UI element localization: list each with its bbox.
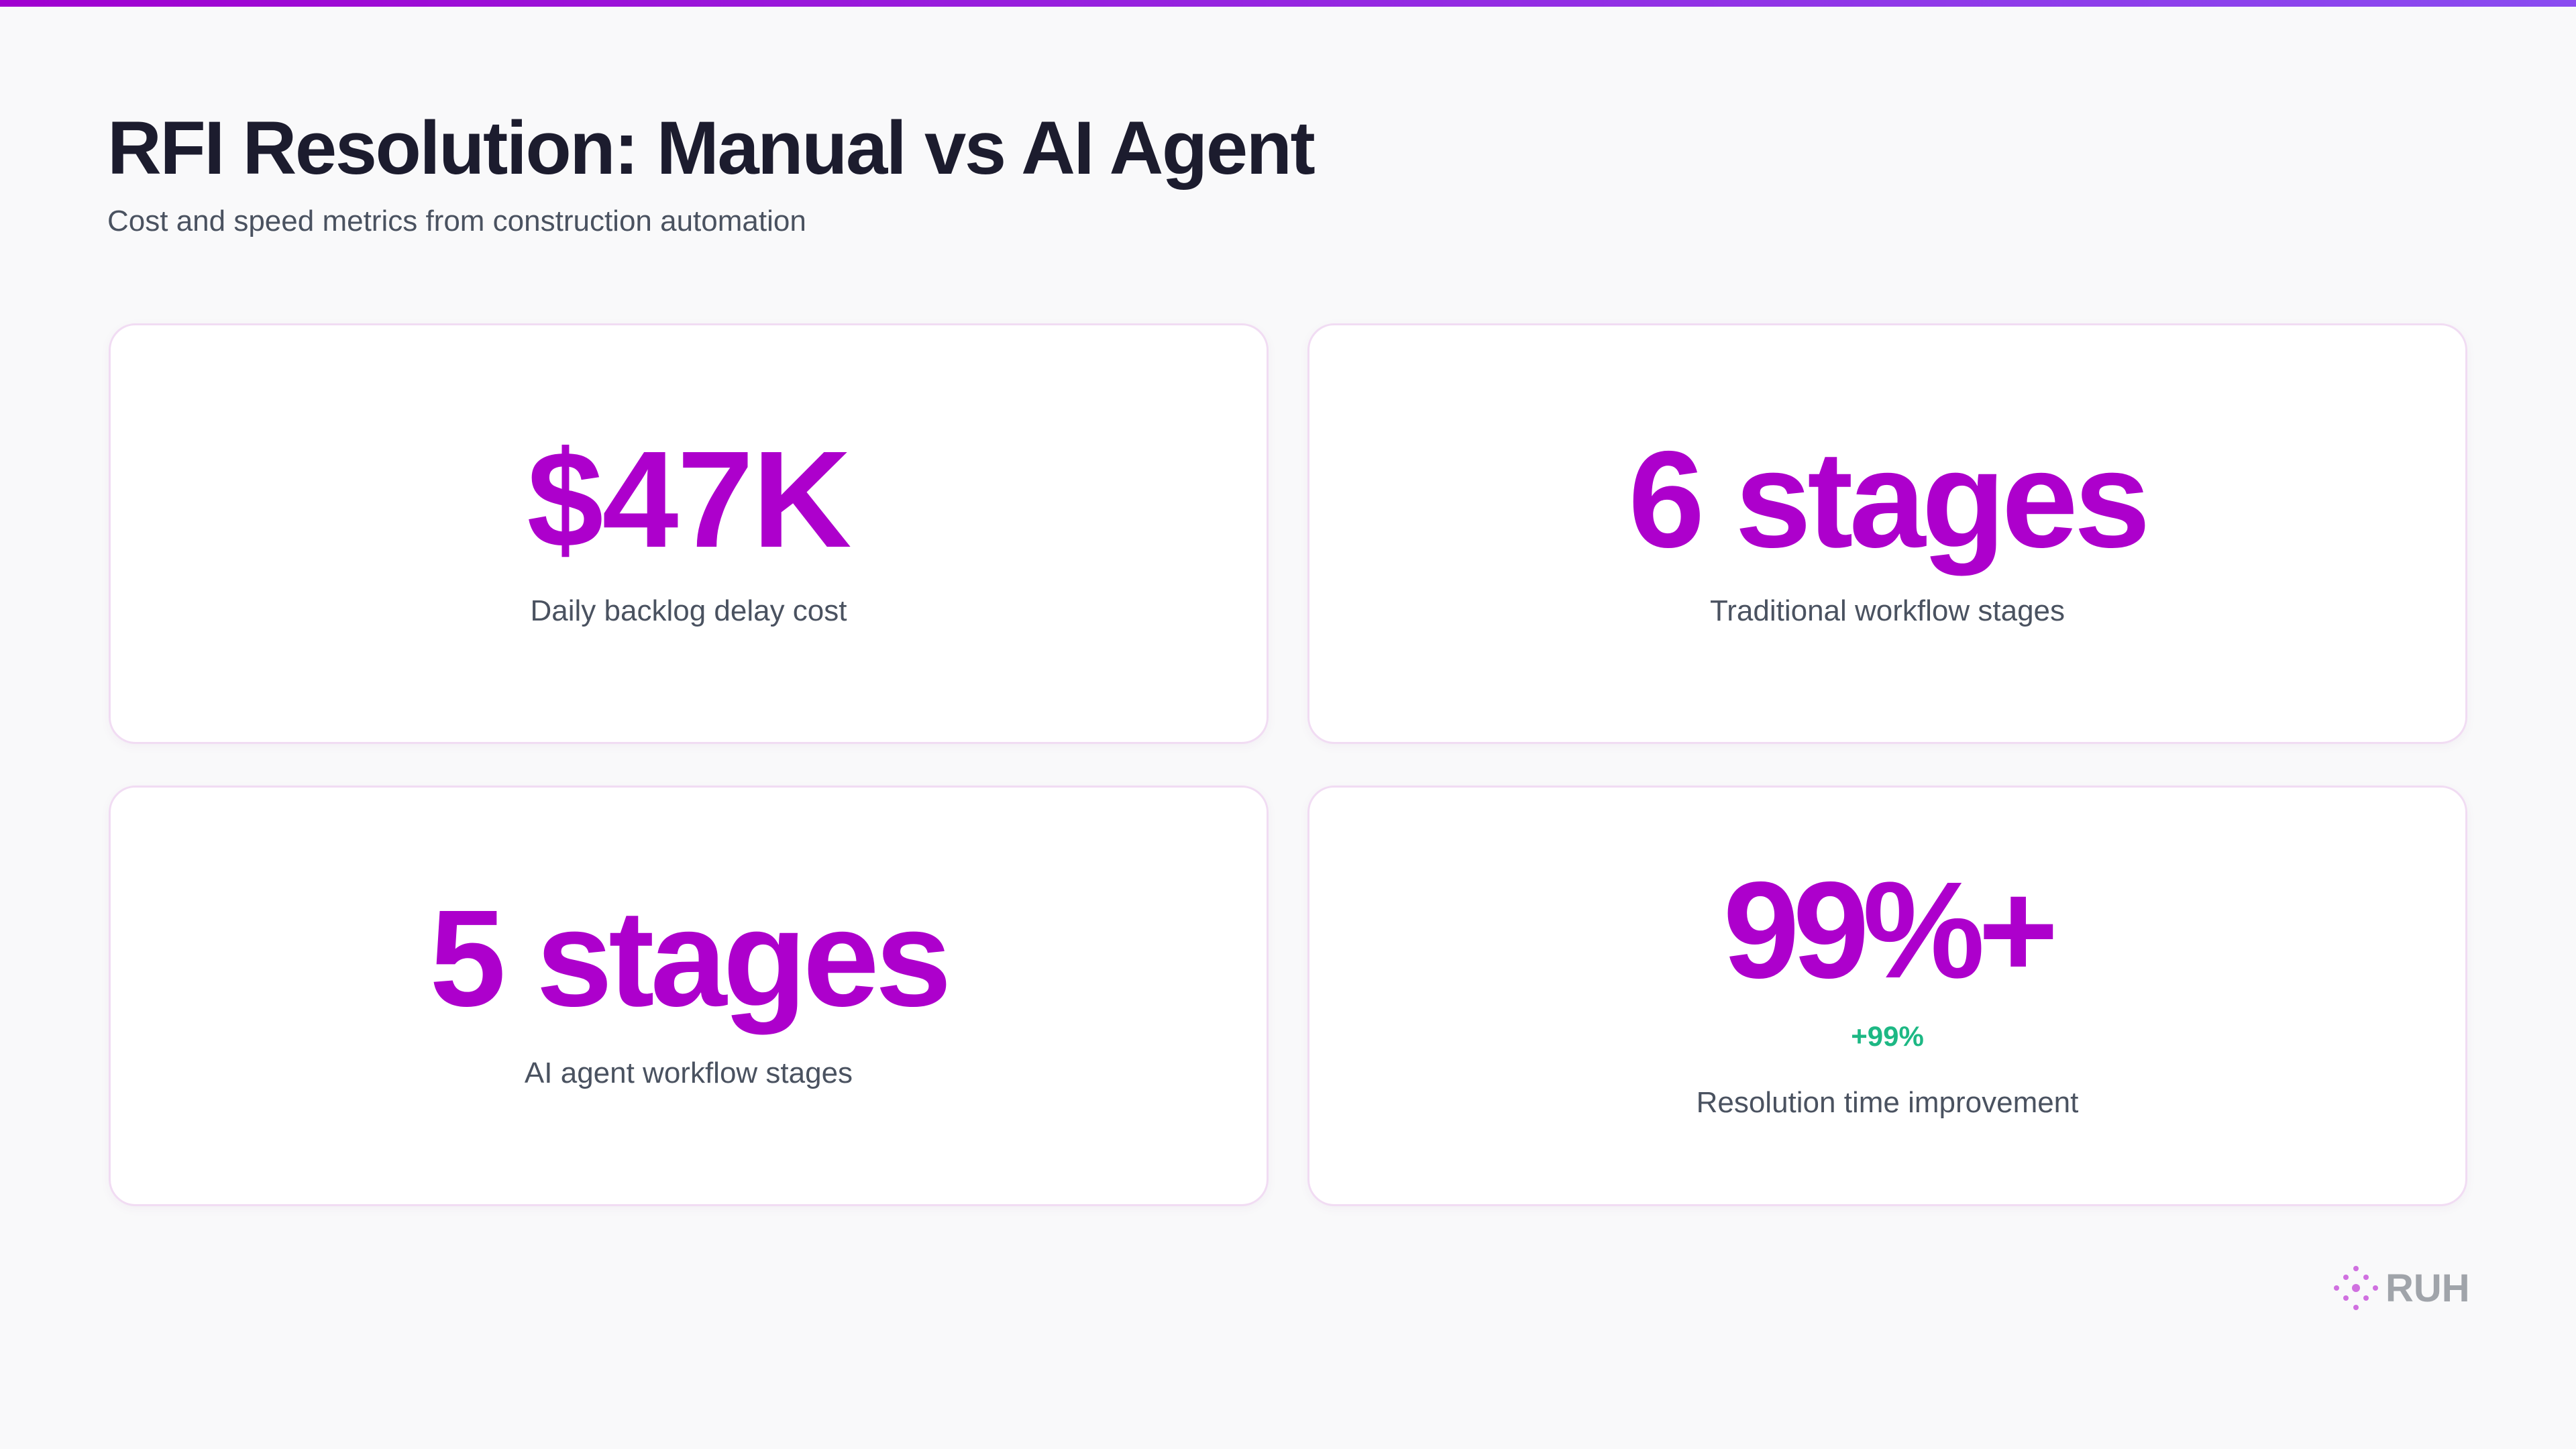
- panel: AI stages: [109, 786, 1269, 1206]
- panel: resolution time: [1307, 786, 2467, 1206]
- icon: dots: [2334, 1266, 2378, 1310]
- subtitle: Cost and speed metrics from construction automation: [107, 205, 806, 237]
- title: RFI Resolution: Manual vs AI Agent: [107, 106, 1313, 190]
- panel: traditional stages: [1307, 323, 2467, 744]
- metric label: Resolution time improvement: [1697, 1086, 2078, 1119]
- panel: daily backlog cost: [109, 323, 1269, 744]
- metric label: Daily backlog delay cost: [530, 594, 847, 627]
- metric label: AI agent workflow stages: [525, 1057, 853, 1089]
- metric value: 99%+: [1723, 853, 2052, 1007]
- change indicator: +99%: [1851, 1020, 1924, 1052]
- metric value: $47K: [527, 423, 851, 576]
- metric value: 6 stages: [1628, 423, 2147, 576]
- top gradient bar: [0, 0, 2576, 7]
- metric label: Traditional workflow stages: [1710, 594, 2065, 627]
- metric value: 5 stages: [429, 881, 948, 1035]
- logo text: RUH: [2385, 1267, 2470, 1310]
- logo: [2334, 1266, 2470, 1310]
